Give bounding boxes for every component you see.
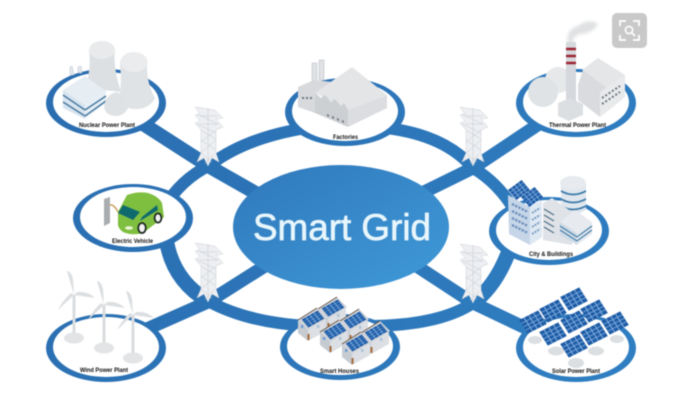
node ring: houses — [280, 314, 400, 380]
label: thermal power plant: Thermal Power Plant — [549, 122, 606, 129]
icon: solar panels — [519, 287, 629, 368]
icon: city and buildings — [508, 176, 592, 245]
node ring: city — [489, 197, 609, 265]
node ring: nuclear — [46, 69, 166, 137]
icon: image search button — [612, 13, 647, 48]
icon: nuclear power plant — [63, 41, 155, 119]
icon: factory — [298, 60, 387, 127]
title: Smart Grid — [253, 207, 431, 248]
network ring and spokes — [140, 122, 542, 332]
node ring: electric vehicle — [73, 184, 193, 252]
node ring: wind — [46, 314, 166, 382]
node ring: solar — [516, 314, 636, 382]
label: electric vehicle: Electric Vehicle — [112, 238, 154, 245]
central hub — [233, 165, 449, 289]
label: city and buildings: City & Buildings — [529, 251, 574, 258]
icon: wind turbines — [58, 271, 154, 364]
label: solar power plant: Solar Power Plant — [552, 368, 600, 375]
node ring: factories — [285, 78, 405, 146]
icon: electric vehicle — [104, 192, 164, 234]
pylon top right — [460, 107, 488, 166]
icon: thermal power plant — [528, 21, 625, 121]
pylon bottom right — [460, 244, 488, 303]
label: smart houses: Smart Houses — [320, 368, 360, 375]
label: factories: Factories — [333, 134, 359, 141]
node ring: thermal — [516, 69, 636, 137]
label: nuclear power plant: Nuclear Power Plant — [79, 122, 135, 129]
pylon top left — [195, 107, 223, 166]
pylon bottom left — [195, 243, 223, 302]
label: wind power plant: Wind Power Plant — [80, 367, 128, 374]
icon: smart houses — [298, 297, 390, 365]
